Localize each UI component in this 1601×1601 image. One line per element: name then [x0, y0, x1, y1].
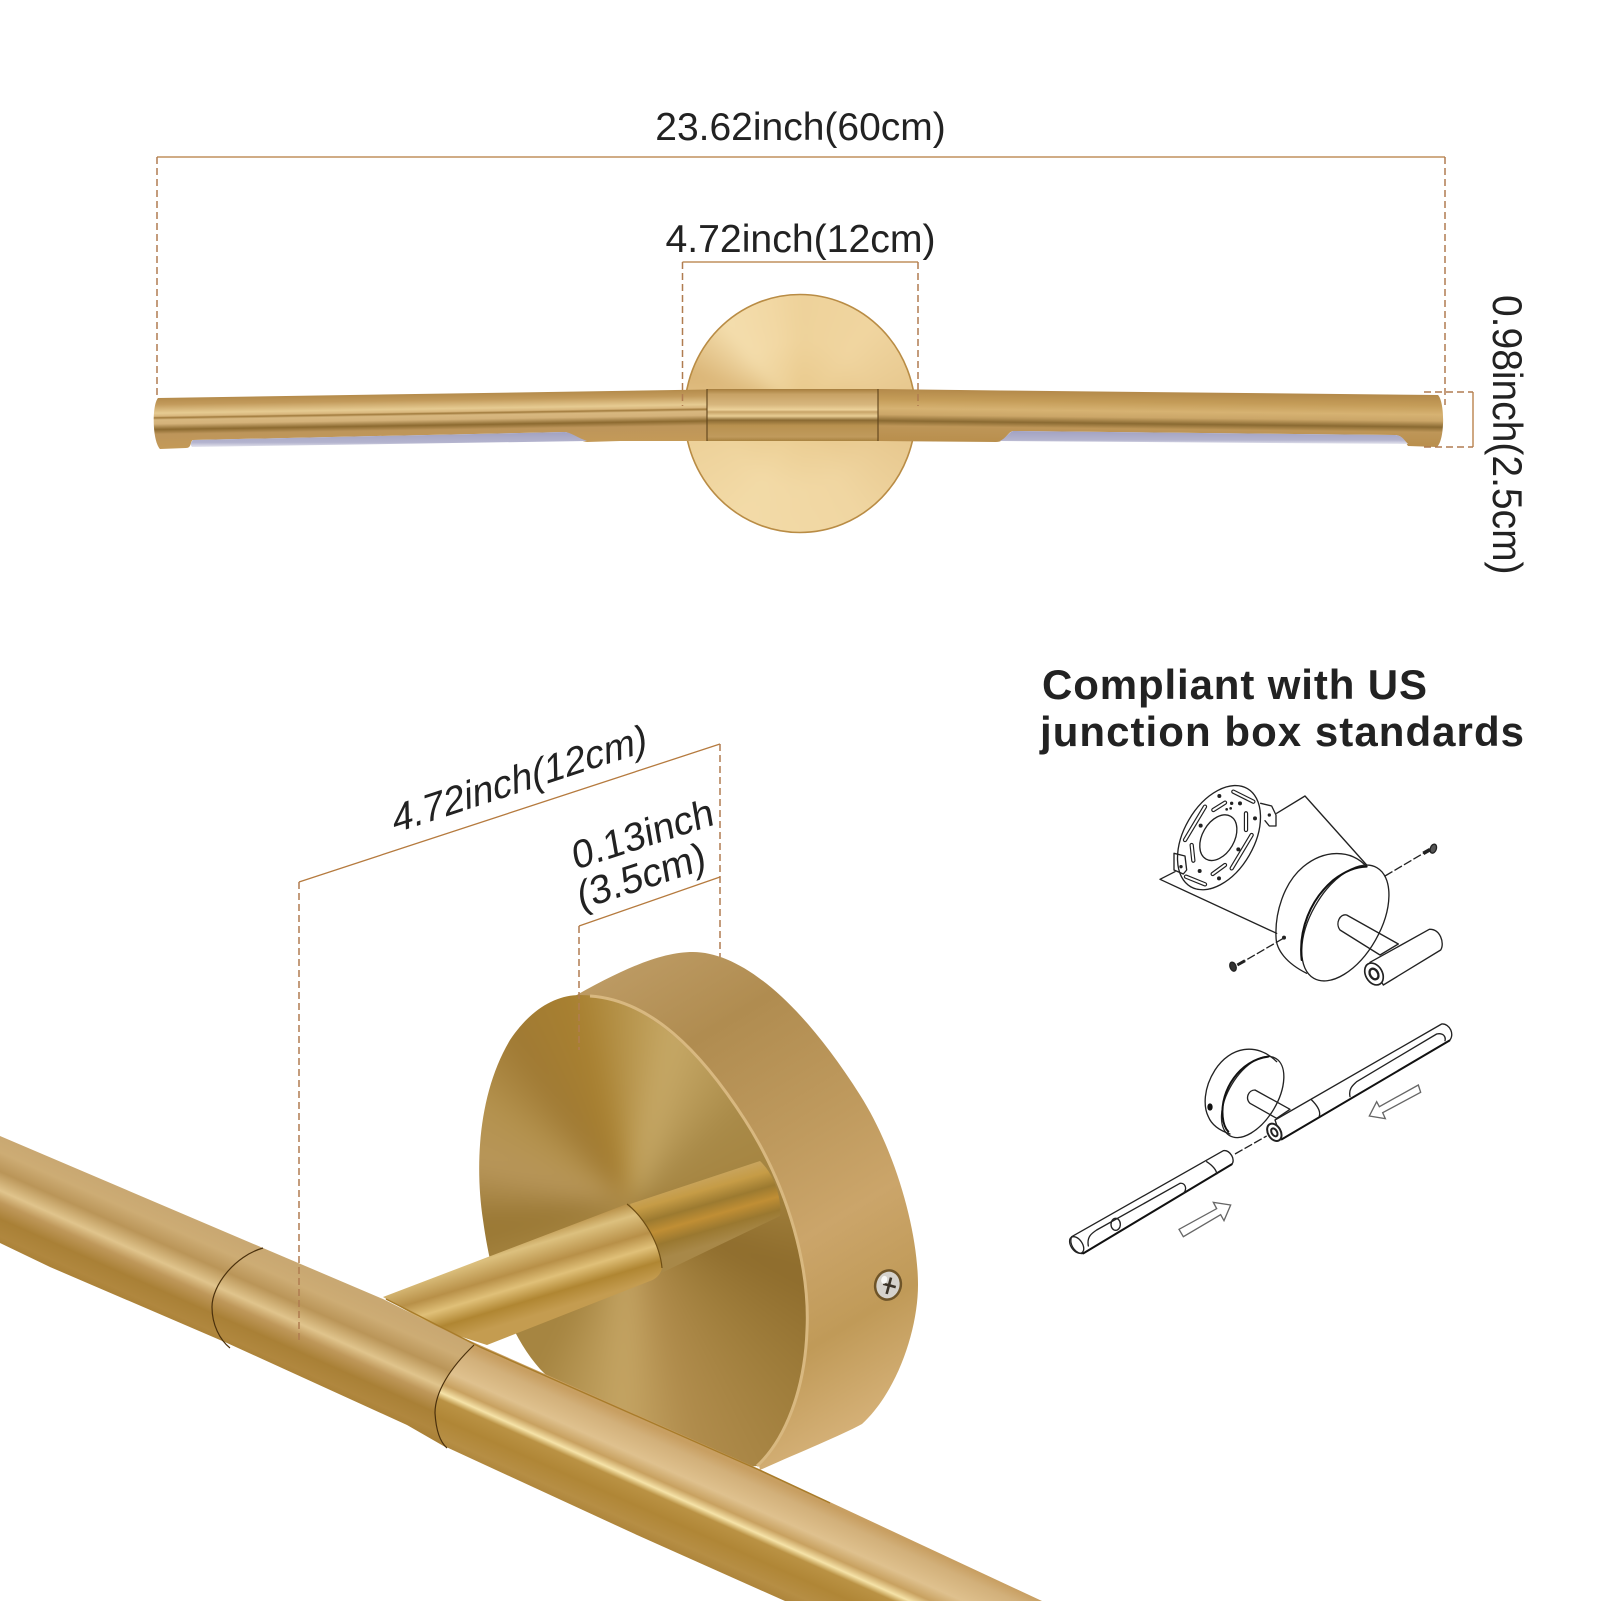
arrow: pushing left tube right	[1179, 1202, 1231, 1237]
arm: sleeve edge	[627, 1204, 662, 1268]
heading: junction box note	[1039, 661, 1524, 755]
label: overall width: 23.62inch(60cm)	[655, 106, 946, 149]
arm: sleeve	[383, 1204, 662, 1345]
disc: round wall plate	[684, 294, 916, 534]
label: plate depth: (3.5cm)	[574, 834, 709, 919]
bar: centre sleeve	[707, 389, 878, 441]
dimension: bar height	[1424, 295, 1531, 575]
label: plate diameter: 4.72inch(12cm)	[665, 218, 936, 261]
heading: junction box note: Compliant with US	[1042, 661, 1427, 708]
diffuser: left lit strip	[191, 432, 587, 447]
bar: left lamp arm	[154, 390, 707, 449]
dimension: overall width	[157, 106, 1445, 405]
connector dashes	[1235, 1136, 1267, 1154]
icon: base arm	[1338, 915, 1398, 955]
diagram: joining the two lamp arms	[1067, 1024, 1452, 1256]
icon: right lamp tube	[1264, 1024, 1452, 1144]
diffuser: right lit strip	[1000, 431, 1408, 444]
disc: front face	[470, 985, 815, 1475]
bar: right lamp arm	[878, 389, 1443, 447]
arrow: pushing right tube left	[1369, 1085, 1421, 1119]
dimension: plate depth	[569, 791, 720, 1050]
bar: angled lamp tube	[0, 1136, 1042, 1601]
icon: base arm	[1248, 1090, 1290, 1118]
dimension: plate diameter	[665, 218, 936, 406]
dimension: plate diameter, side view	[299, 717, 720, 1343]
heading: junction box note: junction box standards	[1039, 708, 1524, 755]
label: plate depth	[569, 791, 717, 919]
icon: right screw	[1385, 843, 1438, 876]
guide lines	[1160, 796, 1367, 933]
icon: mounting plate	[1160, 771, 1278, 904]
icon: cross tube	[1361, 929, 1442, 988]
icon: screw	[870, 1266, 906, 1304]
icon: left lamp tube	[1067, 1151, 1233, 1256]
arm: neck joining plate	[630, 1161, 780, 1276]
disc: side rim	[568, 952, 918, 1470]
icon: round base	[1276, 851, 1407, 995]
label: plate diameter, side view: 4.72inch(12cm)	[388, 717, 651, 842]
label: plate depth: 0.13inch	[569, 791, 717, 879]
diagram: mounting plate and base assembly	[1160, 771, 1442, 995]
panel: front view of the wall light	[154, 294, 1443, 534]
icon: small round base	[1205, 1046, 1297, 1148]
panel: side view of the wall plate and bar	[0, 952, 1042, 1601]
icon: left screw	[1229, 936, 1286, 972]
label: bar height: 0.98inch(2.5cm)	[1484, 295, 1531, 575]
